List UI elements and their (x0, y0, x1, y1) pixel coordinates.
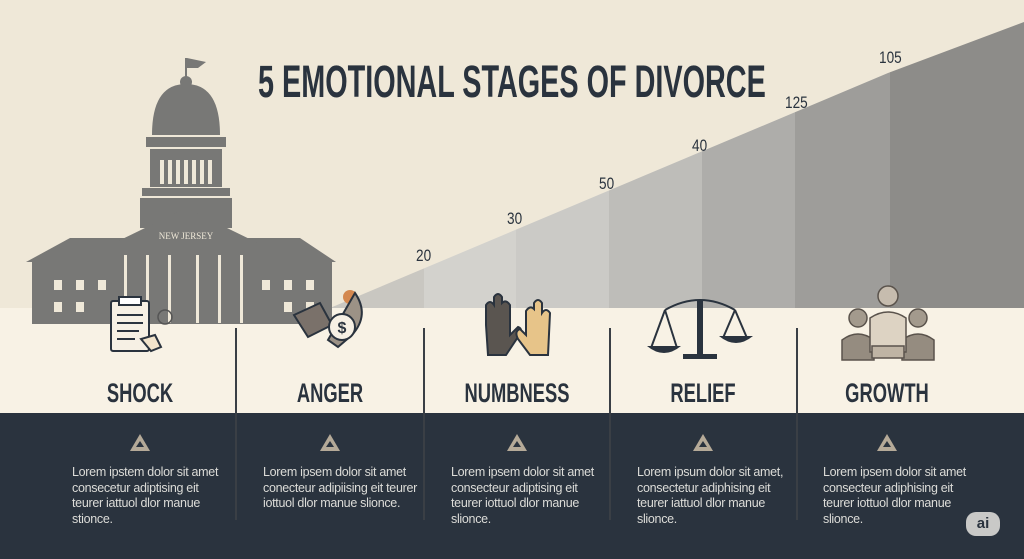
text: 125 (785, 93, 808, 112)
icon: group of people (841, 285, 935, 361)
text: Lorem ipsem dolor sit amet consecteur adiphising eit teurer iottuol dlor manue slionce. (823, 465, 966, 526)
description texts (72, 465, 966, 526)
text: 50 (599, 174, 614, 193)
text: ANGER (297, 378, 363, 408)
ai badge (966, 512, 1000, 536)
capitol building (26, 58, 336, 324)
icon: document with hand (110, 296, 173, 352)
text: GROWTH (845, 378, 929, 408)
text: Lorem ipsum dolor sit amet, consectetur adiphising eit teurer iattuol dlor manue slionce. (637, 465, 783, 526)
dividers (235, 328, 798, 520)
text: 20 (416, 246, 431, 265)
text: 40 (692, 136, 707, 155)
text: RELIEF (670, 378, 736, 408)
icon: money hand: $ (338, 320, 347, 337)
stage labels (107, 378, 929, 408)
text: SHOCK (107, 378, 173, 408)
ai badge: ai (977, 515, 989, 532)
text: Lorem ipstem dolor sit amet consecetur adiptising eit teurer iattuol dlor manue stionce. (72, 465, 218, 526)
text: NUMBNESS (464, 378, 570, 408)
dark panel (0, 413, 1024, 559)
text: Lorem ipsem dolor sit amet consecteur adiptising eit teurer iottuol dlor manue slionce. (451, 465, 594, 526)
text: Lorem ipsem dolor sit amet conecteur adipiising eit teurer iottuol dlor manue slionce. (263, 465, 417, 510)
cream band (0, 308, 1024, 414)
icon: money hand (292, 290, 363, 348)
text: 30 (507, 209, 522, 228)
capitol building: NEW JERSEY (159, 231, 214, 241)
text: 105 (879, 48, 902, 67)
title: 5 EMOTIONAL STAGES OF DIVORCE (258, 56, 766, 107)
icon: hands (485, 293, 551, 356)
numbers (416, 48, 902, 265)
icon: scales (647, 299, 753, 359)
triangle icons (130, 434, 897, 451)
